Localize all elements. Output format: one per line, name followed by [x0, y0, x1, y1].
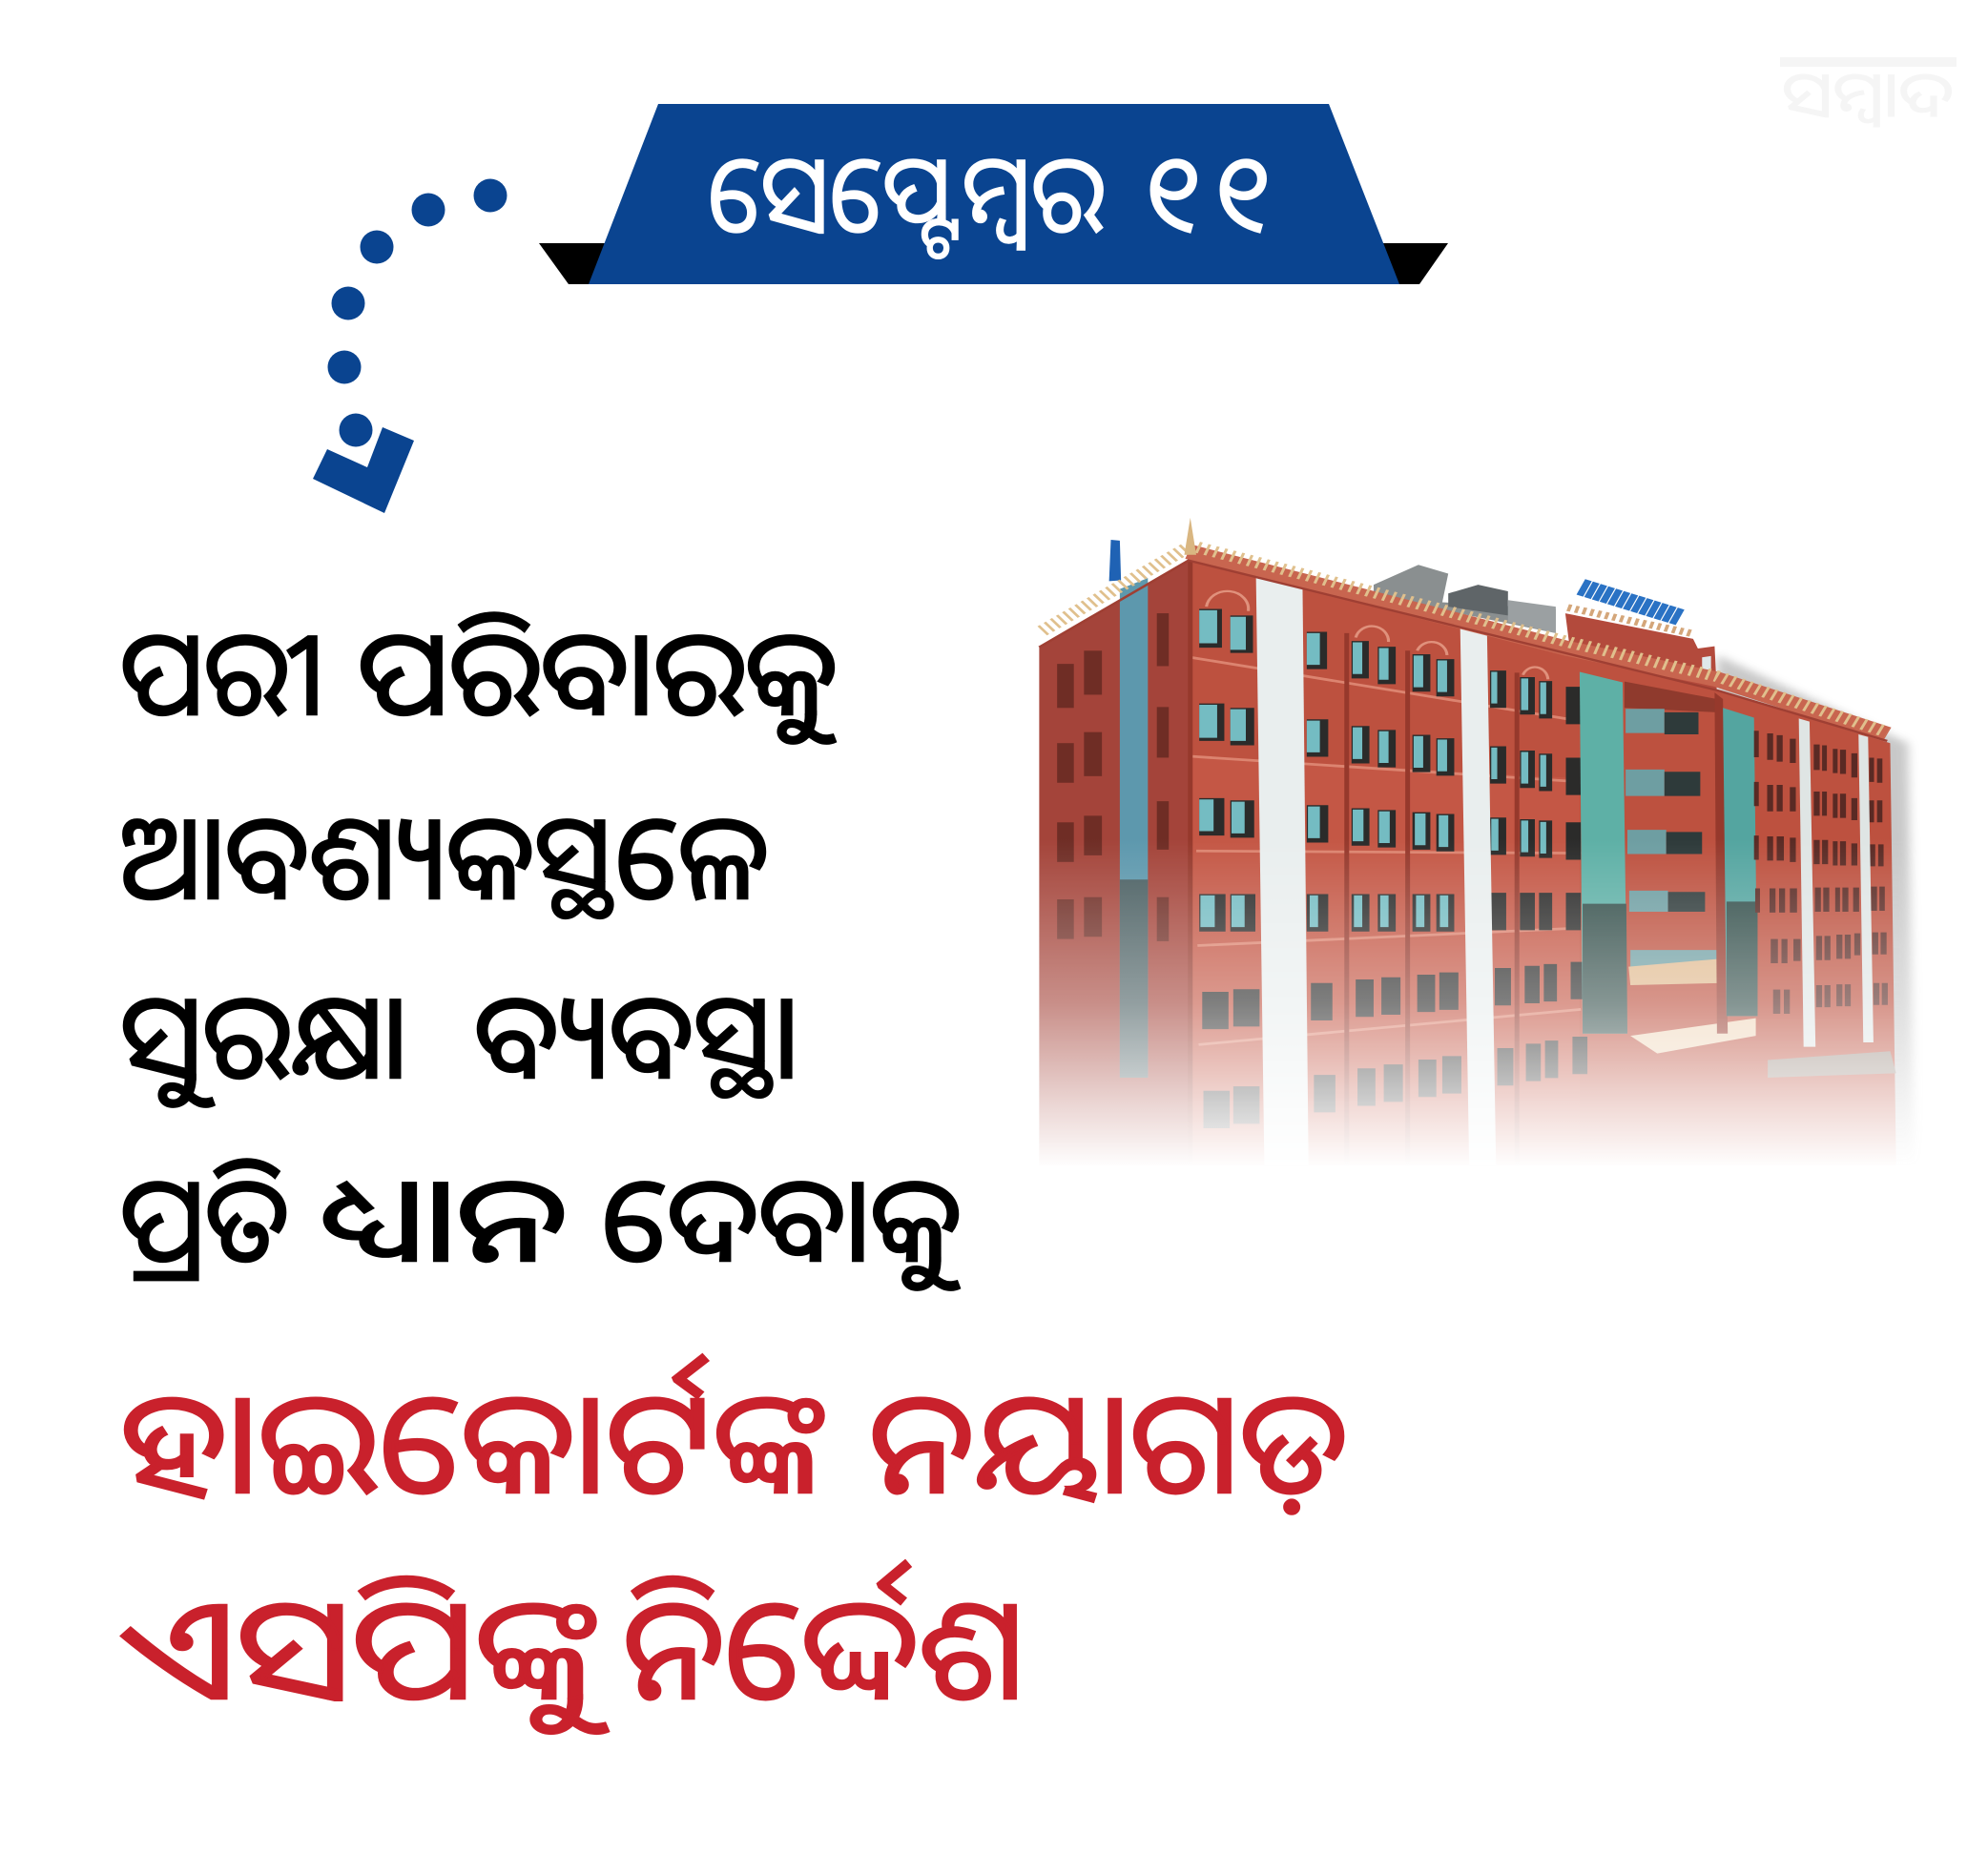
recessed centre block: [1626, 904, 1627, 1028]
line five: [120, 1354, 1348, 1523]
building photo illustration: [1039, 518, 1914, 1165]
floor bands: [1191, 657, 1581, 1044]
line four: [120, 1155, 962, 1290]
line six: [121, 1560, 1025, 1734]
rear block: [1565, 613, 1717, 694]
line two: ଆବଶ୍ୟକସ୍ଥଳେ: [120, 793, 769, 924]
line three: ବ୍ୟବସ୍ଥା: [474, 972, 798, 1103]
line four: ଦେବାକୁ: [602, 1155, 962, 1290]
line six: ନିର୍ଦ୍ଦେଶ: [623, 1560, 1025, 1729]
line five: ନୟାଗଡ଼: [869, 1364, 1348, 1523]
soft shadow: [1717, 655, 1914, 1165]
line one: [120, 608, 838, 744]
banner: date ribbon: [539, 104, 1448, 284]
teal glass panel: [1580, 671, 1627, 1034]
white cladding strips: [1256, 576, 1309, 1165]
banner date text: ୧: [1213, 134, 1272, 256]
rooftop equipment: [1374, 565, 1556, 633]
banner date text: ସେପ୍ଟେମ୍ବର: [708, 134, 1105, 259]
line one: ପରିବାରକୁ: [358, 608, 838, 744]
banner date text: ୧: [1144, 134, 1202, 256]
dotted arrow pointing to headline: [313, 179, 507, 513]
line four: ଧ୍ୟାନ: [320, 1155, 568, 1287]
centre pier: [1714, 692, 1728, 1034]
line six: ଏସପିଙ୍କୁ: [121, 1570, 609, 1734]
lower facade tone: [1189, 756, 1580, 1165]
line four: ପ୍ରତି: [120, 1155, 289, 1287]
line one: ପରୀ: [120, 608, 323, 740]
line five: ହାଇକୋର୍ଟଙ୍କ: [120, 1354, 825, 1523]
headline: red text block: [120, 1354, 1348, 1734]
left wing windows: [1057, 613, 1169, 941]
parapet crenellations: [1039, 547, 1887, 741]
spire: [1185, 518, 1196, 555]
arches: [1207, 591, 1548, 679]
pilasters: [1191, 561, 1517, 1165]
left glass strip: [1120, 578, 1148, 1078]
line three: [120, 972, 798, 1107]
line three: ସୁରକ୍ଷା: [120, 972, 407, 1107]
main facade: [1189, 561, 1896, 1165]
headline: black text block: [120, 608, 962, 1290]
statue emblem: [1109, 540, 1121, 581]
right wing windows: [1754, 731, 1888, 1014]
second glass panel: [1723, 708, 1757, 1016]
watermark logo: ସମ୍ବାଦ: [1782, 59, 1954, 130]
window glass: [1199, 610, 1546, 927]
low roof at right: [1768, 1051, 1896, 1078]
blue rooftop sign: [1581, 587, 1681, 618]
left wing wall: [1039, 561, 1191, 1165]
window frames: [1199, 608, 1587, 1128]
